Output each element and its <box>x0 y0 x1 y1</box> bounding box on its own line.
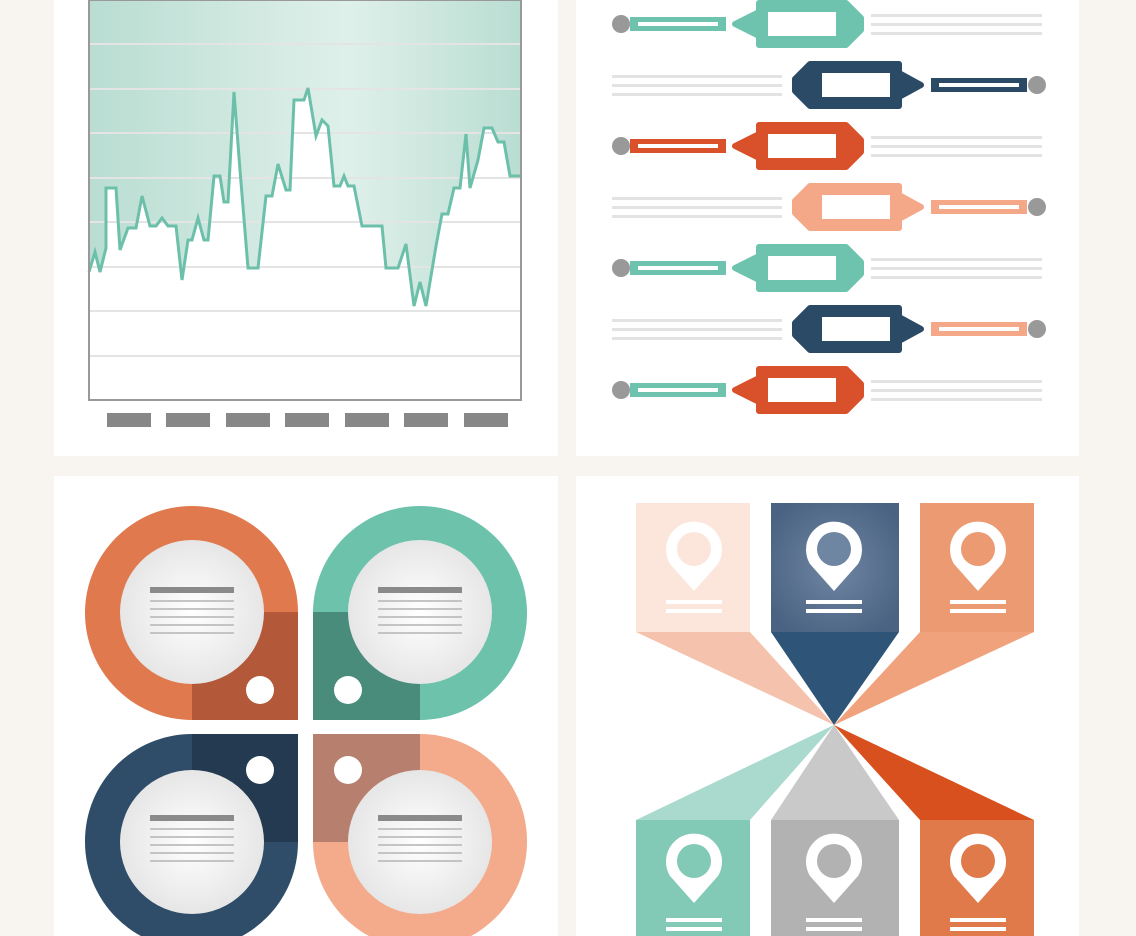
blob orange <box>85 506 298 720</box>
panel: converging pins <box>576 476 1079 936</box>
blob peach <box>313 734 527 936</box>
row 4 peach right <box>612 186 1046 228</box>
chart area fill <box>89 0 521 306</box>
data line <box>89 88 521 306</box>
row 6 navy right <box>612 308 1046 350</box>
blob navy <box>85 734 298 936</box>
funnels <box>636 632 834 725</box>
panel: tag timeline <box>576 0 1079 456</box>
axis labels <box>107 413 508 427</box>
panel: four-part circles <box>54 476 558 936</box>
row 2 navy right <box>612 64 1046 106</box>
row 3 orange left <box>612 125 1042 167</box>
row 1 teal left <box>612 3 1042 45</box>
boxes <box>636 503 750 632</box>
pin icons <box>666 522 1006 903</box>
row 5 teal left <box>612 247 1042 289</box>
panel: line chart <box>54 0 558 456</box>
blob teal <box>313 506 527 720</box>
row 7 orange left <box>612 369 1042 411</box>
